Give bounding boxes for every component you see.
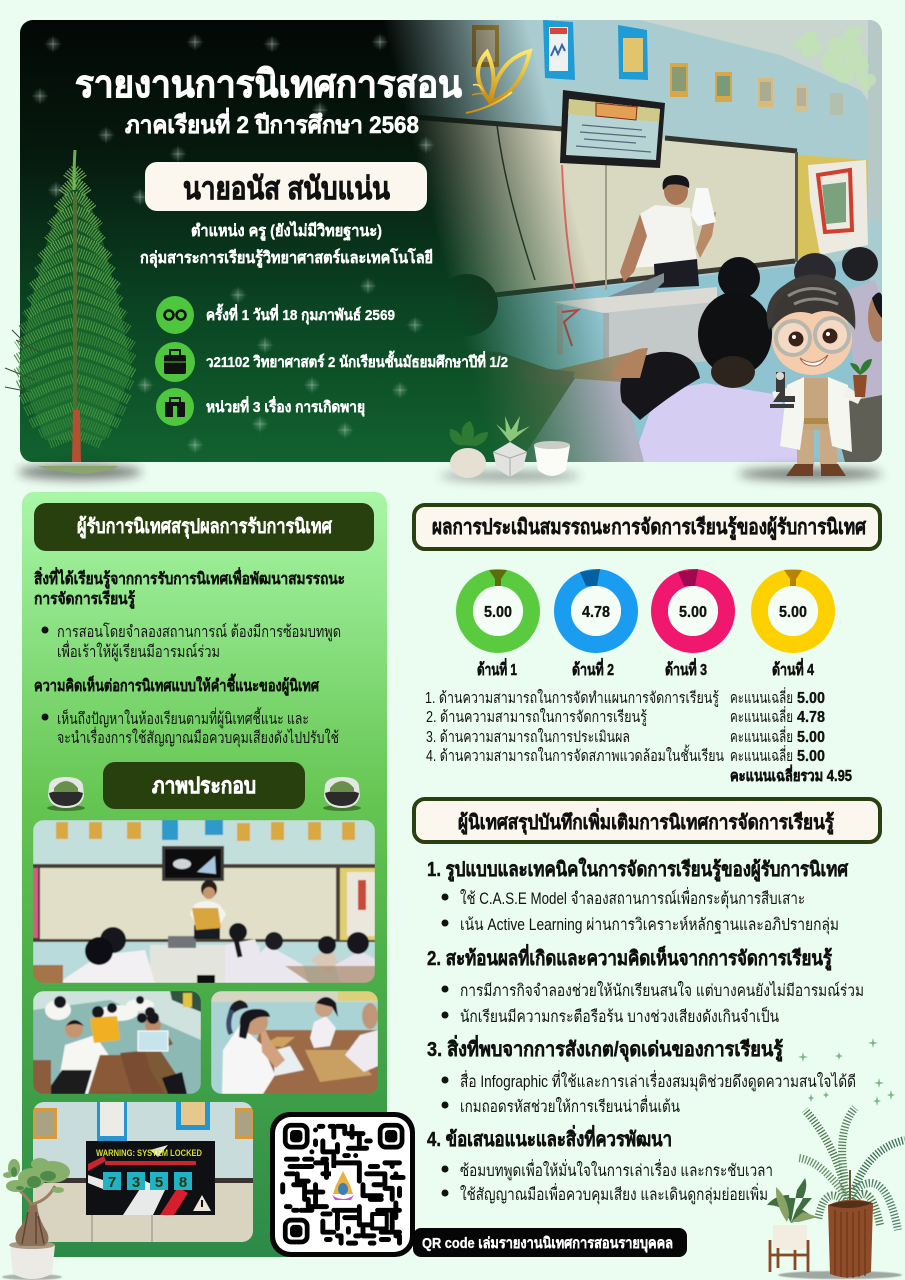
donut labels: ด้านที่ 4 <box>772 658 814 679</box>
donut chart 1 <box>464 570 532 644</box>
warning TV: 7 <box>108 1174 116 1191</box>
notes section 3: 3. สิ่งที่พบจากการสังเกต/จุดเด่นของการเรียนรู้ <box>427 1034 783 1063</box>
title: รายงานการนิเทศการสอน <box>75 64 462 106</box>
opinion heading: ความคิดเห็นต่อการนิเทศแบบให้คำชี้แนะของผู้นิเทศ <box>34 673 320 697</box>
score list: คะแนนเฉลี่ยรวม 4.95 <box>730 764 852 785</box>
warning TV: 5 <box>155 1174 163 1191</box>
donut chart 3 <box>660 569 726 644</box>
notes section 2: 2. สะท้อนผลที่เกิดและความคิดเห็นจากการจัดการเรียนรู้ <box>427 943 832 972</box>
donut labels: ด้านที่ 2 <box>572 658 614 679</box>
info row: subject <box>155 342 508 382</box>
warning TV: 3 <box>132 1174 140 1191</box>
score list: 2. ด้านความสามารถในการจัดการเรียนรู้ <box>426 708 647 727</box>
hero TV screen <box>560 90 665 168</box>
mini terrarium right <box>323 777 361 811</box>
teacher desk <box>554 287 717 362</box>
donut labels <box>477 658 814 679</box>
notes section 4: 4. ข้อเสนอแนะและสิ่งที่ควรพัฒนา <box>427 1124 672 1151</box>
notes section 1: เน้น Active Learning ผ่านการวิเคราะห์หลักฐานและอภิปรายกลุ่ม <box>460 915 839 935</box>
info row: unit: หน่วยที่ 3 เรื่อง การเกิดพายุ <box>206 396 365 417</box>
clover decoration <box>795 26 876 91</box>
name plate <box>145 162 427 211</box>
QR caption: QR code เล่มรายงานนิเทศการสอนรายบุคคล <box>422 1234 673 1253</box>
notes section 2: นักเรียนมีความกระตือรือร้น บางช่วงเสียงดังเกินจำเป็น <box>460 1006 779 1026</box>
starry sparkles <box>30 32 436 455</box>
notes section 4: ใช้สัญญาณมือเพื่อควบคุมเสียง และเดินดูกลุ่มย่อยเพิ่ม <box>460 1183 768 1205</box>
evaluation heading <box>414 505 880 549</box>
score list: 5.00 <box>797 729 825 746</box>
panel heading: ผู้รับการนิเทศสรุปผลการรับการนิเทศ <box>77 515 333 540</box>
notes section 1: ใช้ C.A.S.E Model จำลองสถานการณ์เพื่อกระตุ้นการสืบเสาะ <box>460 887 805 909</box>
donut chart 1: 5.00 <box>484 604 512 621</box>
photo 2: students with cards <box>33 991 201 1094</box>
learned bullet <box>42 622 341 662</box>
name plate: นายอนัส สนับแน่น <box>183 171 390 206</box>
illustration heading <box>103 762 305 809</box>
supervisor notes heading <box>414 799 880 842</box>
score list: คะแนนเฉลี่ย <box>730 726 793 746</box>
donut chart 3: 5.00 <box>679 604 707 621</box>
panel heading <box>34 503 374 551</box>
bonsai plant <box>2 1158 70 1280</box>
illustration heading: ภาพประกอบ <box>152 773 256 798</box>
students <box>453 247 882 462</box>
score list: คะแนนเฉลี่ย <box>730 687 793 707</box>
score list: คะแนนเฉลี่ย <box>730 706 793 726</box>
donut chart 4: 5.00 <box>779 604 807 621</box>
info row: subject: ว21102 วิทยาศาสตร์ 2 นักเรียนชั้นมัธยมศึกษาปีที่ 1/2 <box>206 350 508 371</box>
score list: 1. ด้านความสามารถในการจัดทำแผนการจัดการเรียนรู้ <box>425 689 719 708</box>
opinion bullet: เห็นถึงปัญหาในห้องเรียนตามที่ผู้นิเทศชี้แนะ และ <box>57 707 309 729</box>
green sparkles <box>798 1038 895 1106</box>
learning area text: กลุ่มสาระการเรียนรู้วิทยาศาสตร์และเทคโนโลยี <box>140 247 433 269</box>
learned heading: สิ่งที่ได้เรียนรู้จากการรับการนิเทศเพื่อพัฒนาสมรรถนะ <box>34 567 345 590</box>
QR caption <box>413 1228 687 1257</box>
opinion bullet <box>42 707 339 748</box>
tree <box>5 150 142 480</box>
score list: 5.00 <box>797 748 825 765</box>
position text: ตำแหน่ง ครู (ยังไม่มีวิทยฐานะ) <box>191 221 382 242</box>
gold leaf logo <box>466 51 530 113</box>
teacher presenting <box>620 175 716 288</box>
warning TV: 8 <box>179 1174 187 1191</box>
donut labels: ด้านที่ 3 <box>665 658 707 679</box>
left summary panel <box>22 492 387 1257</box>
potted palm <box>778 1108 905 1279</box>
QR crest <box>331 1168 355 1202</box>
warning TV: WARNING: SYSTEM LOCKED <box>96 1148 202 1159</box>
donut chart 2: 4.78 <box>582 604 610 621</box>
info row: date: ครั้งที่ 1 วันที่ 18 กุมภาพันธ์ 2569 <box>206 303 395 325</box>
donut chart 4 <box>760 570 826 644</box>
score list: คะแนนเฉลี่ย <box>730 745 793 765</box>
notes section 3 <box>427 1034 856 1116</box>
subtitle: ภาคเรียนที่ 2 ปีการศึกษา 2568 <box>125 107 419 139</box>
opinion bullet: จะนำเรื่องการใช้สัญญาณมือควบคุมเสียงดังไปปรับใช้ <box>57 726 339 748</box>
potted rubber plant <box>767 1178 818 1272</box>
score list <box>425 687 852 785</box>
score list: 5.00 <box>797 690 825 707</box>
notes section 4: ซ้อมบทพูดเพื่อให้มั่นใจในการเล่าเรื่อง และกระชับเวลา <box>460 1159 773 1181</box>
learned heading: การจัดการเรียนรู้ <box>34 589 135 610</box>
notes section 3: เกมถอดรหัสช่วยให้การเรียนน่าตื่นเต้น <box>460 1095 680 1116</box>
hero banner <box>5 20 888 480</box>
hero classroom photo <box>20 20 888 462</box>
supervisor notes heading: ผู้นิเทศสรุปบันทึกเพิ่มเติมการนิเทศการจัดการเรียนรู้ <box>458 807 834 836</box>
learned bullet: เพื่อเร้าให้ผู้เรียนมีอารมณ์ร่วม <box>57 640 220 662</box>
learned bullet: การสอนโดยจำลองสถานการณ์ ต้องมีการซ้อมบทพูด <box>57 622 341 642</box>
QR code <box>270 1112 415 1257</box>
donut labels: ด้านที่ 1 <box>477 658 517 679</box>
info row: unit <box>156 388 365 426</box>
learned heading <box>34 567 345 610</box>
notes section 2 <box>427 943 864 1026</box>
wall posters <box>472 20 843 115</box>
notes section 4 <box>427 1124 773 1205</box>
photo 4: warning screen <box>33 1102 253 1242</box>
dark green overlay <box>20 20 630 462</box>
photo 3: students on worksheet <box>211 991 378 1094</box>
notes section 1 <box>427 857 849 935</box>
info row: date <box>156 296 395 334</box>
photo 1: classroom teaching <box>33 820 375 983</box>
decorative pots <box>440 416 580 481</box>
score list: 3. ด้านความสามารถในการประเมินผล <box>426 728 630 746</box>
cartoon scientist character <box>738 275 882 480</box>
warning TV <box>86 1141 215 1215</box>
donut chart 2 <box>562 569 630 644</box>
score list: 4. ด้านความสามารถในการจัดสภาพแวดล้อมในชั้นเรียน <box>426 744 724 765</box>
score list: 4.78 <box>797 709 825 726</box>
classroom poster art <box>795 152 868 262</box>
mini terrarium left <box>47 777 85 811</box>
laptop <box>608 273 664 297</box>
